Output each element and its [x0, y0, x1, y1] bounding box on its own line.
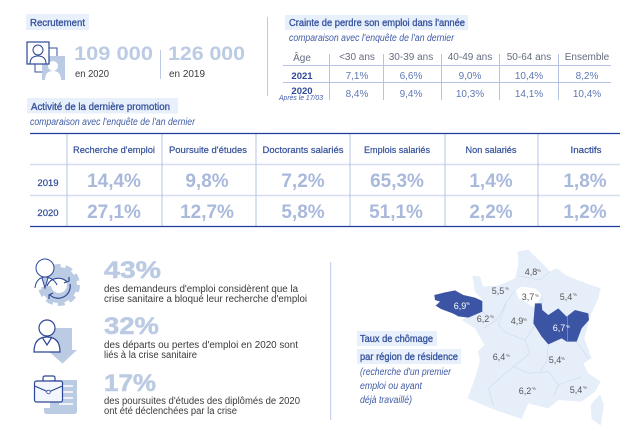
table: crainte by age [278, 51, 611, 102]
stat: 17% [104, 370, 300, 417]
map labels: 4,9 [511, 316, 523, 326]
stat: 43%: 43% [104, 257, 161, 284]
table: crainte by age: 8,2% [576, 71, 599, 82]
map labels: 6,9 [454, 301, 466, 311]
map labels: % [523, 317, 527, 322]
table: crainte by age: 8,4% [346, 89, 369, 100]
table: activité: Emplois salariés [364, 145, 430, 156]
table: crainte by age: Ensemble [565, 52, 610, 63]
map labels: % [506, 353, 510, 358]
map labels: 5,4 [549, 355, 561, 365]
map: France unemployment by region [434, 250, 604, 426]
table: activité: 51,1% [369, 202, 423, 223]
table: crainte by age: 2020 [291, 86, 313, 97]
table: crainte by age: 10,4% [573, 89, 601, 100]
note: definition: (recherche d'un premier [360, 367, 452, 378]
table: crainte by age: 30-39 ans [389, 52, 433, 63]
table: activité: 27,1% [87, 202, 141, 223]
region: Bourgogne-Franche-Comté [533, 303, 589, 344]
table: crainte by age: 6,6% [400, 71, 423, 82]
panel: impact de la crise [34, 257, 307, 417]
map labels: % [573, 292, 577, 297]
icon: candidates [27, 42, 65, 80]
map labels: % [566, 324, 570, 329]
stat: 32%: des départs ou pertes d'emploi en 2020 sont [104, 340, 298, 351]
table: crainte by age: 14,1% [515, 89, 543, 100]
region: Bretagne [434, 290, 482, 318]
subtitle: activité: comparaison avec l'enquête de l'an dernier [30, 117, 196, 128]
map labels: 6,7 [553, 323, 565, 333]
table: crainte by age: 2021 [291, 71, 313, 82]
stat: 2020 recruitment: 109 000 [74, 44, 153, 65]
table: crainte by age: 40-49 ans [448, 52, 492, 63]
table: activité: 2020 [37, 208, 59, 219]
table: activité: Non salariés [466, 145, 517, 156]
region: Île-de-France [516, 287, 542, 307]
stat: 17%: ont été déclenchées par la crise [104, 406, 237, 417]
table: crainte by age: 50-64 ans [507, 52, 551, 63]
stat: 2020 recruitment: en 2020 [75, 69, 109, 80]
map labels: % [561, 356, 565, 361]
table: crainte by age: 9,0% [459, 71, 482, 82]
table: crainte by age: 7,1% [346, 71, 369, 82]
stat: 17%: 17% [104, 370, 156, 397]
map labels: % [535, 293, 539, 298]
table: activité: Poursuite d'études [169, 145, 247, 156]
table: activité: 2,2% [469, 202, 513, 223]
map labels: 5,4 [560, 292, 572, 302]
map labels: 4,8 [525, 267, 537, 277]
table: activité: 14,4% [87, 171, 141, 192]
map labels: % [466, 301, 470, 306]
heading: crainte [285, 15, 468, 30]
stat: 32%: 32% [104, 313, 159, 340]
map labels: 3,7 [522, 292, 534, 302]
map labels: % [490, 314, 494, 319]
heading: par région: par région de résidence [360, 352, 458, 363]
table: activité: 65,3% [370, 171, 424, 192]
map labels: 6,4 [493, 352, 505, 362]
panel: taux de chômage text [357, 331, 461, 406]
panel: crainte de perdre son emploi [278, 15, 611, 102]
table: crainte by age: Après le 17/03 [278, 95, 323, 102]
panel: recrutement [26, 14, 245, 80]
table: activité: 1,4% [469, 171, 513, 192]
heading: recrutement [26, 14, 89, 30]
map labels [454, 267, 587, 396]
map labels: 5,4 [570, 385, 582, 395]
stat: 32%: liés à la crise sanitaire [104, 350, 197, 361]
stat: 43%: crise sanitaire a bloqué leur recherche d'emploi [104, 294, 307, 305]
heading: crainte: Crainte de perdre son emploi dans l'année [289, 18, 465, 29]
table: activité: 2019 [37, 178, 59, 189]
stat: 43%: des demandeurs d'emploi considèrent que la [104, 284, 298, 295]
table: activité: 12,7% [180, 202, 234, 223]
table: activité: Doctorants salariés [262, 145, 344, 156]
stat: 32% [104, 313, 298, 361]
table: activité [30, 134, 620, 226]
map labels: 6,2 [477, 314, 489, 324]
table: activité: 7,2% [281, 171, 325, 192]
icon: gear with person [35, 259, 78, 304]
icon: briefcase with document [34, 376, 77, 414]
map labels: 5,5 [492, 286, 504, 296]
stat: 2020 recruitment [74, 44, 153, 80]
table: activité: Recherche d'emploi [73, 145, 155, 156]
note: definition: déjà travaillé) [360, 395, 412, 406]
region: Corse [591, 394, 604, 426]
subtitle: crainte: comparaison avec l'enquête de l'an dernier [289, 33, 455, 44]
table: activité: Inactifs [570, 145, 602, 156]
stat: 17%: des poursuites d'études des diplômés de 2020 [104, 396, 300, 407]
heading: taux de chômage: Taux de chômage [360, 334, 433, 345]
stat: 2019 recruitment [168, 44, 245, 80]
stat: 43% [104, 257, 307, 305]
map labels: % [537, 268, 541, 273]
table: activité: 9,8% [185, 171, 229, 192]
stat: 2019 recruitment: en 2019 [169, 69, 205, 80]
heading: activité: Activité de la dernière promotion [31, 102, 170, 113]
panel: activité de la dernière promotion [27, 98, 620, 226]
table: crainte by age: Âge [293, 51, 311, 64]
table: crainte by age: <30 ans [339, 52, 375, 63]
map labels: % [505, 286, 509, 291]
heading: activité [27, 98, 178, 114]
table: crainte by age: 9,4% [400, 89, 423, 100]
note: definition [360, 367, 452, 406]
table: crainte by age: 10,3% [456, 89, 484, 100]
note: definition: emploi ou ayant [360, 381, 423, 392]
stat: 2019 recruitment: 126 000 [168, 44, 245, 65]
table: activité: 5,8% [281, 202, 325, 223]
map labels: % [532, 386, 536, 391]
icon: person with down arrow [34, 320, 77, 364]
map labels: % [583, 385, 587, 390]
heading: recrutement: Recrutement [30, 18, 85, 29]
table: activité: 1,8% [563, 171, 607, 192]
table: activité: 1,2% [563, 202, 607, 223]
table: crainte by age: 10,4% [515, 71, 543, 82]
map labels: 6,2 [519, 386, 531, 396]
